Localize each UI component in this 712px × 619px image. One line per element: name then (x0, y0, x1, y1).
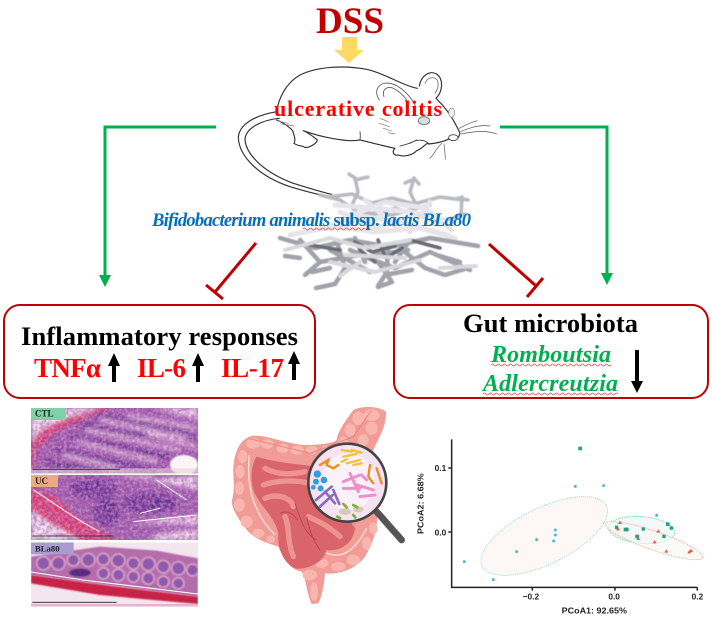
spell-check underline: animalis (303, 228, 365, 230)
panel: histology (31, 408, 199, 607)
label: IL-17: IL-17 (221, 353, 284, 383)
icon: bacteria cluster (280, 174, 478, 288)
label: Adlercreutzia: Adlercreutzia (481, 371, 618, 397)
icon: up arrow 1 (108, 353, 120, 382)
chart: PCoA scatter (416, 439, 706, 615)
axis tick labels: 0.0 (608, 592, 620, 602)
label: ulcerative colitis: ulcerative colitis (274, 96, 442, 121)
panel: gut microbiota (394, 305, 708, 398)
label: BLa80: BLa80 (35, 543, 60, 553)
points: blue (463, 484, 658, 581)
axis tick labels: 0.2 (692, 592, 704, 602)
ellipse: blue group (470, 481, 619, 591)
arrow: green right (500, 127, 613, 285)
points: green (578, 447, 673, 538)
axes (448, 439, 697, 591)
label: UC: UC (35, 476, 48, 486)
icon: up arrow 3 (288, 351, 300, 380)
axis tick labels: −0.2 (523, 592, 539, 602)
label: TNF alpha: TNFα (34, 353, 101, 383)
heading: gut microbiota: Gut microbiota (463, 308, 638, 338)
axis tick labels: 0.1 (435, 463, 447, 473)
magnifier handle (377, 512, 402, 540)
axis tick labels (435, 463, 704, 602)
label: probiotic strain: Bifidobacterium animalis subsp. lactis BLa80 (151, 210, 471, 231)
large intestine (232, 407, 386, 604)
heading: inflammatory responses: Inflammatory responses (21, 321, 298, 351)
points: red (616, 521, 693, 553)
arrow: green left (99, 127, 216, 287)
image: UC section (31, 475, 198, 540)
axis title: PCoA1: PCoA1: 92.65% (562, 605, 628, 615)
arrow: DSS to mouse (334, 37, 364, 63)
panel: inflammatory responses (4, 305, 315, 398)
ellipse: green group (607, 514, 676, 546)
label: Romboutsia: Romboutsia (490, 342, 611, 368)
icon: up arrow 2 (192, 353, 204, 382)
label: IL-6: IL-6 (137, 353, 186, 383)
magnifier lens (308, 444, 386, 522)
title: DSS: DSS (316, 1, 384, 42)
inhibition arrow: right (489, 244, 543, 297)
inhibition arrow: left (206, 243, 256, 299)
icon: down arrow (631, 350, 643, 393)
image: BLa80 section (31, 542, 199, 607)
axis title: PCoA2: PCoA2: 6.68% (416, 473, 426, 534)
label: CTL: CTL (35, 409, 53, 419)
icon: mouse (238, 67, 497, 197)
small intestine (252, 457, 355, 569)
image: CTL section (31, 408, 198, 475)
axis tick labels: 0.0 (435, 527, 447, 537)
ellipse: red group (602, 515, 706, 566)
illustration: intestine with magnifier (232, 407, 402, 604)
